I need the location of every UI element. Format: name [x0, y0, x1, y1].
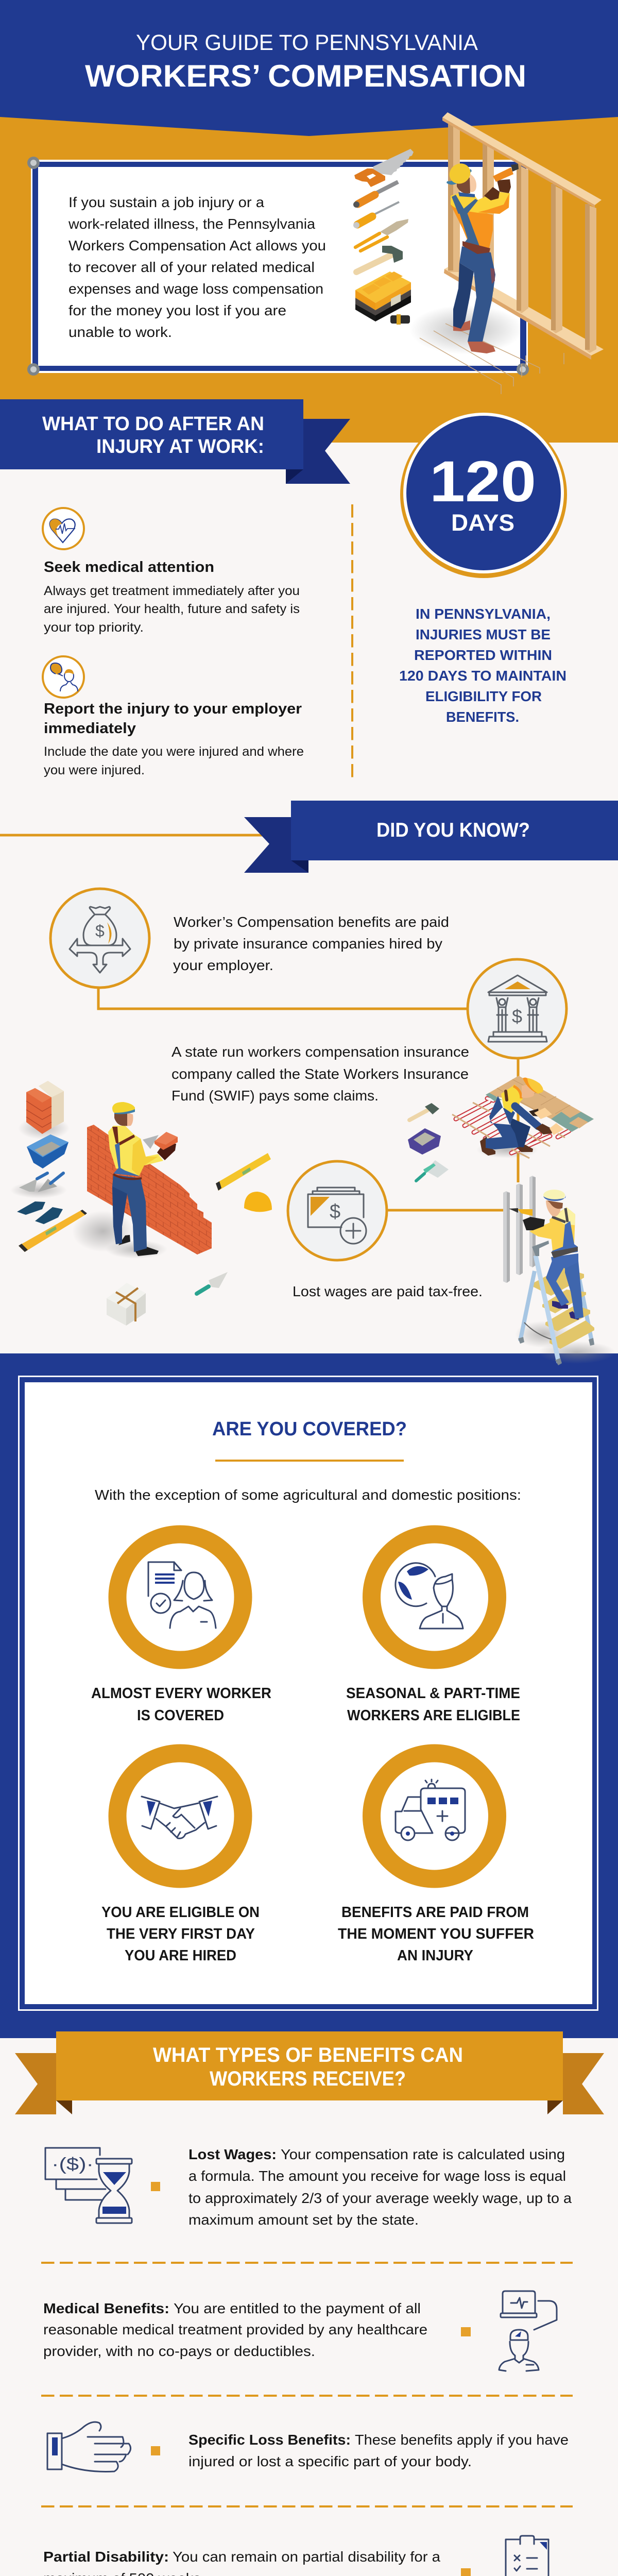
icon: ambulance [396, 1780, 465, 1840]
text: provider, with no co-pays or deductibles. [43, 2343, 315, 2359]
label: BENEFITS ARE PAID FROM [341, 1904, 529, 1921]
label: YOU ARE ELIGIBLE ON [101, 1904, 260, 1921]
label: YOU ARE HIRED [125, 1947, 236, 1964]
label: THE MOMENT YOU SUFFER [338, 1926, 534, 1942]
text: You can remain on partial disability for a [173, 2549, 440, 2565]
boots [480, 1137, 495, 1156]
label [346, 1685, 520, 1724]
step: seek medical attention: Seek medical attention [44, 559, 214, 575]
item: almost every worker [117, 1534, 243, 1660]
callout: 120 days text [399, 606, 566, 725]
brick bundle [107, 1283, 146, 1326]
text: by private insurance companies hired by [174, 936, 442, 952]
badge: 120 days: DAYS [451, 510, 514, 536]
hammer [356, 246, 403, 272]
label: WORKERS ARE ELIGIBLE [347, 1707, 520, 1724]
illustration: tools [353, 149, 414, 325]
trowel [197, 1272, 228, 1294]
illustration: carpenter and wood frame [409, 112, 604, 394]
text [43, 2549, 440, 2576]
text: Worker’s Compensation benefits are paid [174, 914, 449, 930]
intro text: for the money you lost if you are [68, 302, 286, 318]
posts [503, 1176, 536, 1283]
benefit: partial disability [43, 2536, 548, 2576]
callout: 120 days text: INJURIES MUST BE [416, 626, 551, 642]
heading: immediately [44, 720, 136, 737]
illustration: ladder worker [503, 1176, 615, 1365]
illustration: bricklayer scene [10, 1081, 272, 1326]
label [91, 1685, 271, 1724]
intro text [68, 194, 326, 340]
title [85, 30, 526, 93]
benefit: lost wages [45, 2146, 572, 2228]
text: Specific Loss Benefits: [188, 2432, 351, 2448]
label: AN INJURY [397, 1947, 473, 1964]
label: THE VERY FIRST DAY [107, 1926, 255, 1942]
panel: intro [27, 157, 529, 376]
gloves [17, 1201, 63, 1224]
text: injured or lost a specific part of your body. [188, 2453, 472, 2469]
level [19, 1210, 87, 1252]
section: are you covered [0, 1353, 618, 2038]
ladder worker [509, 1190, 583, 1320]
bricklayer [106, 1102, 178, 1259]
icon: money hourglass [45, 2148, 132, 2223]
text: Include the date you were injured and where [44, 744, 304, 759]
icon: doctor laptop [499, 2291, 557, 2371]
badge: 120 days: 120 [430, 449, 536, 514]
wall [72, 1125, 212, 1255]
heading: Report the injury to your employer [44, 701, 302, 717]
item: private insurance [50, 889, 449, 988]
callout: 120 days text: ELIGIBILITY FOR [425, 688, 542, 704]
hands and tiles [536, 1124, 552, 1134]
label: ALMOST EVERY WORKER [91, 1685, 271, 1702]
text: are injured. Your health, future and safety is [44, 602, 300, 616]
head [522, 1084, 535, 1098]
banner: did you know: DID YOU KNOW? [376, 819, 530, 841]
heading [44, 701, 302, 737]
brick stacks [18, 1081, 70, 1140]
icon: bank [468, 959, 566, 1058]
text: reasonable medical treatment provided by any healthcare [43, 2321, 427, 2337]
heating wire [452, 1098, 569, 1158]
item: tax-free wages: Lost wages are paid tax-free. [293, 1283, 483, 1299]
text [43, 2300, 427, 2359]
saw [354, 149, 414, 187]
level small [216, 1153, 271, 1191]
icon: money bag arrows: $ [95, 922, 105, 940]
benefit: medical [43, 2291, 557, 2371]
text: to approximately 2/3 of your average weekly wage, up to a [188, 2190, 572, 2206]
title: WORKERS’ COMPENSATION [85, 59, 526, 93]
text [173, 914, 449, 973]
intro text: If you sustain a job injury or a [68, 194, 264, 210]
text: Partial Disability: [43, 2549, 169, 2565]
icon: cash plus: $ [330, 1201, 340, 1223]
banner: what to do [0, 399, 350, 484]
callout: 120 days text: REPORTED WITHIN [414, 647, 552, 663]
grommets [27, 157, 529, 376]
text: your top priority. [44, 620, 144, 635]
step: seek medical attention [43, 508, 300, 635]
icon: bank: $ [512, 1006, 522, 1027]
badge: 120 days [400, 411, 567, 578]
header background [0, 0, 618, 443]
ladder [515, 1267, 615, 1364]
pliers [355, 219, 408, 251]
hard hat [244, 1192, 272, 1212]
icon: hand [47, 2422, 131, 2471]
text: You are entitled to the payment of all [174, 2300, 421, 2316]
step: report the injury [43, 656, 304, 777]
callout: 120 days text: IN PENNSYLVANIA, [416, 606, 551, 622]
intro text: unable to work. [68, 324, 172, 340]
label: SEASONAL & PART-TIME [346, 1685, 520, 1702]
section: are you covered: ARE YOU COVERED? [212, 1418, 407, 1440]
ladder front rail [532, 1241, 562, 1365]
text: Always get treatment immediately after you [44, 584, 300, 598]
intro text: work-related illness, the Pennsylvania [68, 216, 315, 232]
intro text: to recover all of your related medical [68, 259, 315, 275]
illustration: tile worker [408, 1076, 594, 1181]
item: seasonal [372, 1534, 497, 1660]
tub [27, 1134, 68, 1168]
text: These benefits apply if you have [355, 2432, 569, 2448]
text: A state run workers compensation insurance [171, 1044, 469, 1060]
banner: what types of benefits: WORKERS RECEIVE? [210, 2067, 406, 2090]
screwdriver [353, 202, 399, 228]
carpenter [445, 159, 519, 353]
icon: heart [43, 508, 84, 549]
body [510, 1118, 530, 1147]
label: IS COVERED [137, 1707, 224, 1724]
icon: cash plus [288, 1161, 387, 1260]
label [338, 1904, 534, 1964]
icon: document woman [148, 1562, 216, 1628]
toolbox [355, 272, 411, 325]
tiles [486, 1076, 594, 1132]
trowels [10, 1173, 67, 1198]
text: maximum amount set by the state. [188, 2212, 419, 2228]
text: Your compensation rate is calculated using [281, 2146, 565, 2162]
text [44, 584, 300, 635]
label [101, 1904, 260, 1964]
icon: money hourglass: ·($)· [52, 2155, 94, 2174]
text [188, 2146, 572, 2228]
item: tax-free wages [288, 1161, 483, 1299]
icon: money bag arrows [50, 889, 149, 988]
icon: handshake [142, 1797, 217, 1838]
chisel [353, 182, 398, 208]
text [188, 2432, 569, 2469]
text [44, 744, 304, 777]
text: Medical Benefits: [43, 2300, 169, 2316]
text: Fund (SWIF) pays some claims. [171, 1088, 379, 1104]
banner: what to do: INJURY AT WORK: [96, 436, 264, 457]
benefit: specific loss [47, 2422, 569, 2471]
icon: clipboard [506, 2536, 548, 2576]
intro text: Workers Compensation Act allows you [68, 238, 326, 253]
item: first day [117, 1753, 243, 1879]
banner: did you know [244, 801, 618, 873]
banner: what types of benefits: WHAT TYPES OF BENEFITS CAN [153, 2044, 463, 2066]
item: state fund [171, 959, 566, 1104]
bottom rail [444, 264, 604, 355]
section: are you covered: With the exception of some agricultural and domestic positions: [95, 1487, 521, 1503]
text: your employer. [173, 957, 273, 973]
banner: what types of benefits [15, 2031, 604, 2114]
text: a formula. The amount you receive for wage loss is equal [188, 2168, 566, 2184]
text: Lost Wages: [188, 2146, 277, 2162]
icon: speech person [43, 656, 84, 698]
text: company called the State Workers Insurance [171, 1066, 469, 1082]
banner: what to do: WHAT TO DO AFTER AN [42, 413, 264, 435]
intro text: expenses and wage loss compensation [68, 281, 323, 297]
callout: 120 days text: 120 DAYS TO MAINTAIN [399, 668, 566, 684]
item: benefits paid [372, 1753, 497, 1879]
icon: globe man [396, 1563, 463, 1629]
text: you were injured. [44, 763, 145, 777]
title: YOUR GUIDE TO PENNSYLVANIA [136, 30, 478, 55]
callout: 120 days text: BENEFITS. [446, 709, 519, 725]
tools [408, 1103, 449, 1181]
text [171, 1044, 469, 1104]
top rail [442, 112, 602, 205]
studs [448, 124, 596, 353]
